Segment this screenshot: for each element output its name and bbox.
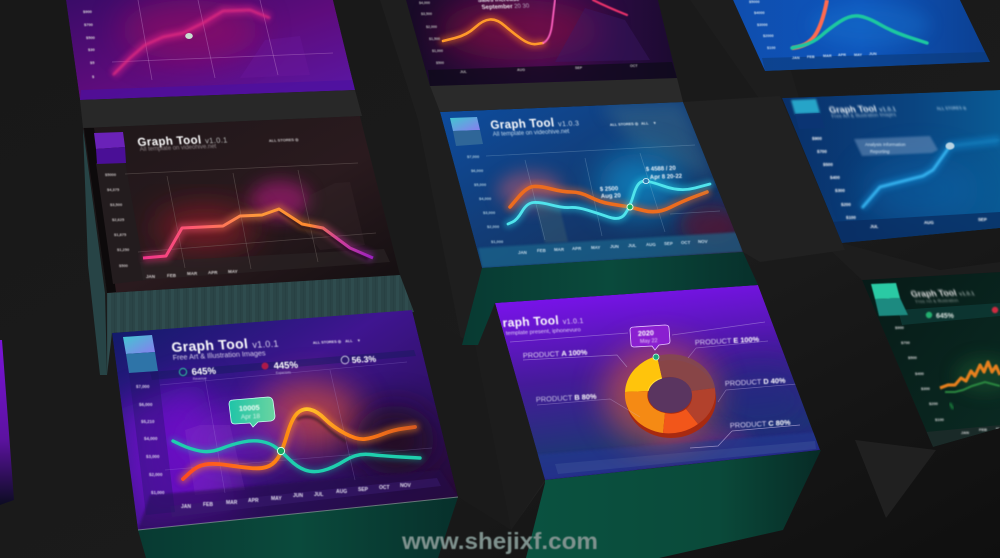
- month labels: JAN: [146, 274, 155, 279]
- tooltip pill: [854, 136, 938, 156]
- axis values: OCT: [630, 64, 638, 68]
- axis values: $900: [895, 325, 905, 330]
- axis values: $3,500: [421, 12, 432, 16]
- value label: Apr: [646, 166, 683, 181]
- tooltip pill: Reporting: [870, 149, 890, 154]
- axis values: [467, 154, 504, 244]
- axis values: $: [92, 74, 95, 79]
- axis values: $5,210: [141, 419, 155, 424]
- callout: 10005 Apr 18: 10005: [239, 403, 260, 413]
- sidebar tabs: [123, 335, 175, 515]
- month labels: OCT: [379, 485, 390, 491]
- month labels: [181, 483, 412, 510]
- month labels: APR: [248, 498, 259, 504]
- month labels: [518, 239, 708, 255]
- stat: 445%: 445%: [273, 360, 299, 372]
- callout: 10005 Apr 18: Apr 18: [241, 413, 261, 421]
- stats row: [926, 307, 998, 320]
- axis values: $2,000: [426, 25, 437, 29]
- line chart: orange series: [510, 186, 707, 212]
- line chart: noisy orange series: [940, 362, 1000, 409]
- axis values: $4000: [754, 11, 765, 15]
- axis values: $100: [846, 215, 856, 220]
- axis values: $30: [88, 47, 95, 52]
- panel: dark graph tool card: [83, 116, 400, 293]
- axis values: [749, 0, 877, 60]
- axis values: $3000: [757, 23, 768, 27]
- month labels: FEB: [537, 248, 546, 253]
- axis values: $5: [90, 60, 95, 65]
- donut glow: [604, 345, 716, 445]
- panel: right dark green graph card (out of focus): [862, 272, 1000, 447]
- value label: Apr: Apr 8 20-22: [650, 174, 683, 181]
- axis values: $4,000: [144, 436, 158, 441]
- stat: 645%: [179, 366, 217, 381]
- axis values: $200: [929, 401, 939, 406]
- axis values: $500: [908, 355, 918, 360]
- subtitle: Free Art & Illustration Images: [172, 348, 266, 362]
- subtitle: All template on videohive.net: [139, 144, 217, 153]
- title: Graph Tool: Graph Tool v1.0.1: [909, 287, 976, 299]
- axis values: $500: [436, 61, 444, 65]
- axis values: MAR: [823, 54, 832, 58]
- axis values: $4,000: [419, 1, 430, 5]
- axis values: $2,000: [487, 224, 500, 229]
- axis values: $1,500: [429, 37, 440, 41]
- subtitle: All template on videohive.net: [492, 129, 570, 138]
- axis values: JAN: [961, 430, 969, 435]
- callout: 2020 May 22: 2020: [638, 328, 654, 338]
- watermark: www.shejixf.com: [401, 528, 598, 554]
- axis values: [136, 384, 165, 495]
- month labels: JAN: [181, 504, 191, 510]
- axis values: $5000: [105, 172, 117, 177]
- title: Graph Tool: Graph Tool v1.0.1: [137, 133, 228, 149]
- month labels: MAY: [271, 496, 282, 502]
- month labels: MAR: [226, 500, 238, 506]
- axis values: FEB: [979, 427, 987, 432]
- store selector: ALL STORES ◎ ALL ▾: [313, 339, 361, 345]
- panel: top right blue curve chart: [733, 0, 990, 71]
- label: Product B: PRODUCT B 80%: [536, 392, 597, 404]
- month labels: OCT: [681, 240, 691, 245]
- sidebar tabs: [450, 117, 483, 146]
- curve: green line: [792, 16, 927, 48]
- line chart: glowing blue line: [862, 140, 1000, 208]
- axis values: MAY: [854, 53, 863, 57]
- axis values: AUG: [924, 220, 934, 225]
- panel: top left purple line chart: [66, 0, 355, 100]
- tooltip pill: Analysis Information: [865, 142, 906, 147]
- panel: green block under the blue graph card: [462, 252, 758, 345]
- month labels: AUG: [646, 242, 656, 247]
- axis values: $2,000: [149, 472, 163, 477]
- month labels: MAY: [591, 245, 600, 250]
- axis values: $5000: [749, 0, 760, 4]
- sidebar tabs: [94, 132, 126, 164]
- month labels: NOV: [400, 483, 412, 489]
- axis values: $5,000: [474, 182, 487, 187]
- label: Product C: [690, 418, 800, 448]
- panel: right blue graph card (out of focus): [782, 90, 1000, 243]
- panel: blue graph tool card: [440, 102, 743, 268]
- axis values: $200: [841, 202, 851, 207]
- panel: top middle dark purple curve chart: [406, 0, 677, 86]
- month labels: JUN: [293, 493, 303, 499]
- axis values: SEP: [978, 217, 987, 222]
- subtitle: Free Art & Illustration: [915, 298, 960, 305]
- panel: teal block under the dark graph card: [83, 128, 414, 375]
- value label: Aug: Aug 20: [601, 193, 622, 200]
- month labels: JUL: [314, 492, 323, 498]
- label: Product B: [536, 392, 640, 417]
- value label: Apr: $ 4588 / 20: [646, 166, 677, 173]
- panel: green block under the donut card: [526, 450, 821, 558]
- label: Product A: [523, 348, 627, 367]
- axis values: $1,875: [114, 232, 127, 237]
- panel: left edge purple card sliver: [0, 340, 14, 505]
- axis values: APR: [838, 53, 846, 57]
- axis values: [419, 1, 638, 74]
- axis values: $2,625: [112, 217, 125, 222]
- month labels: AUG: [336, 489, 347, 495]
- curve: red line: [792, 0, 827, 48]
- title: Graph Tool clipped by card: raph Tool v1.0.1: [502, 312, 584, 330]
- peak node: [643, 178, 649, 184]
- month labels: JUL: [628, 243, 637, 248]
- axis values: $4,000: [479, 196, 492, 201]
- stat: 645%: 645%: [191, 366, 217, 378]
- callout: 2020 May 22: [630, 325, 670, 350]
- axis values: $100: [767, 46, 775, 50]
- month labels: APR: [208, 270, 218, 275]
- axis values: $2000: [763, 34, 774, 38]
- callout: 2020 May 22: May 22: [640, 338, 658, 345]
- month labels: JAN: [518, 250, 527, 255]
- axis values: JUL: [460, 70, 468, 74]
- label: Product A: PRODUCT A 100%: [523, 348, 588, 360]
- month labels: MAY: [228, 269, 238, 274]
- axis values: $900: [812, 136, 822, 141]
- axis values: JUL: [870, 224, 879, 229]
- month labels: MAR: [187, 271, 198, 276]
- title: Graph Tool: Graph Tool v1.0.1: [170, 334, 279, 355]
- axis values: $500: [86, 35, 96, 40]
- axis values: $4,375: [107, 187, 120, 192]
- axis values: $400: [915, 371, 925, 376]
- axis values: $400: [830, 175, 840, 180]
- month labels: FEB: [167, 273, 177, 278]
- axis values: $3,500: [110, 202, 123, 207]
- value label: Aug: $ 2500: [600, 186, 619, 193]
- axis values: $6,000: [471, 168, 484, 173]
- stats row: 645%: [936, 313, 955, 320]
- axis values: M: [996, 426, 1000, 431]
- stat: 445%: [262, 360, 299, 375]
- month labels: SEP: [664, 241, 673, 246]
- month labels: FEB: [203, 502, 213, 508]
- line chart: pink curve: [113, 10, 270, 75]
- month labels: JUN: [610, 244, 619, 249]
- axis values: $3,000: [146, 454, 160, 459]
- store selector: ALL STORES ◎: [936, 105, 967, 111]
- store selector: ALL STORES ◎ ALL ▾: [610, 121, 657, 127]
- data point marker: [946, 142, 954, 150]
- axis values: $700: [817, 149, 827, 154]
- sidebar tab: [791, 99, 820, 114]
- axis values: $700: [84, 22, 94, 27]
- panel: donut chart card: [495, 285, 820, 480]
- axis values: $1,000: [491, 239, 504, 244]
- label: Product D: [718, 376, 797, 402]
- axis values: $300: [921, 386, 931, 391]
- donut chart: [625, 354, 716, 438]
- axis values: $500: [119, 263, 129, 268]
- axis values: JAN: [792, 56, 800, 60]
- sidebar tabs: [871, 283, 908, 316]
- month labels: APR: [572, 246, 582, 251]
- store selector: ALL STORES ◎: [268, 137, 299, 143]
- chart callout: September 20 30: [481, 4, 531, 11]
- stat: 445%: Expenses: [276, 370, 291, 375]
- axis values: JUN: [869, 52, 877, 56]
- stat: 56.3%: 56.3%: [351, 354, 377, 365]
- value label: Aug: [600, 186, 622, 200]
- axis values: $700: [901, 340, 911, 345]
- month labels: MAR: [554, 247, 565, 252]
- curve: orange and pink line: [443, 0, 627, 44]
- title: Graph Tool: Graph Tool v1.0.3: [490, 117, 580, 132]
- stat: 645%: Revenue: [193, 376, 207, 381]
- label: Product E: [688, 335, 768, 358]
- title: Graph Tool: Graph Tool v1.0.1: [828, 103, 898, 115]
- axis values: $1,250: [117, 247, 130, 252]
- chart callout: [477, 0, 531, 11]
- axis values: $3,000: [483, 210, 496, 215]
- crossing node: [627, 204, 633, 210]
- axis values: $6,000: [139, 402, 153, 407]
- axis values: [895, 325, 1000, 435]
- line chart: teal series: [173, 441, 420, 472]
- crossing node: [277, 447, 285, 455]
- line chart: cyan series: [508, 181, 710, 224]
- data point node: [653, 354, 659, 360]
- axis values: [105, 172, 130, 268]
- subtitle: template present, iphonevuro: [506, 327, 581, 337]
- axis values: $900: [83, 9, 93, 14]
- month labels: NOV: [698, 239, 708, 244]
- panel: main purple graph tool card: [112, 310, 458, 530]
- month labels: [146, 269, 238, 279]
- axis values: $100: [935, 417, 945, 422]
- callout: 10005 Apr 18: [229, 397, 275, 427]
- axis values: AUG: [517, 68, 525, 72]
- axis values: [83, 9, 96, 79]
- month labels: SEP: [358, 487, 369, 493]
- label: Product E: PRODUCT E 100%: [695, 335, 760, 347]
- data point marker: [185, 33, 193, 39]
- line chart: revenue line: [143, 209, 373, 259]
- axis values: FEB: [807, 55, 815, 59]
- label: Product C: PRODUCT C 80%: [730, 418, 791, 430]
- axis values: $1,000: [151, 490, 165, 495]
- axis values: $1,000: [432, 49, 443, 53]
- axis values: $7,000: [467, 154, 480, 159]
- axis values: $7,000: [136, 384, 150, 389]
- panel: green block under the bottom graph card: [138, 497, 458, 558]
- label: Product D: PRODUCT D 40%: [725, 376, 786, 388]
- line chart: orange series: [183, 409, 415, 479]
- axis values: [812, 136, 987, 229]
- axis values: $500: [823, 162, 833, 167]
- subtitle: Free Art & Illustration Images: [831, 112, 897, 120]
- axis values: $300: [835, 188, 845, 193]
- axis values: SEP: [575, 66, 583, 70]
